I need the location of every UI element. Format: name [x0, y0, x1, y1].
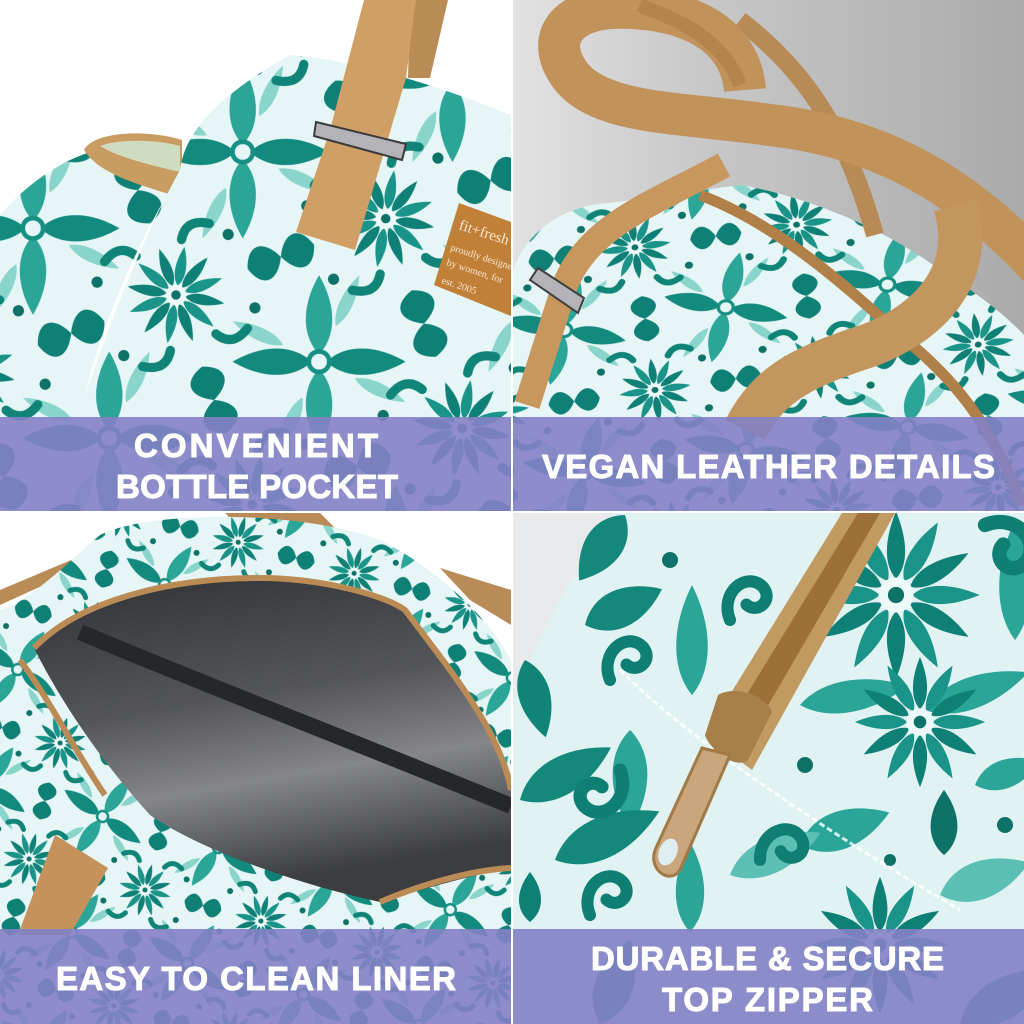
panel: vegan leather details — [513, 0, 1024, 511]
panel: durable and secure top zipper — [510, 504, 1024, 1024]
side puff of the bag — [0, 150, 180, 511]
caption text — [118, 433, 398, 499]
liner seam — [80, 632, 511, 806]
caption text: DURABLE & SECURE — [591, 940, 944, 977]
brand label: proudly designed — [449, 242, 518, 274]
looping leather strap — [559, 8, 1024, 268]
caption band — [0, 417, 511, 511]
panel: convenient bottle pocket — [0, 0, 518, 511]
caption band — [0, 929, 511, 1024]
caption text: TOP ZIPPER — [662, 981, 873, 1018]
zipper pull tab — [654, 748, 730, 876]
bag fabric — [513, 513, 1024, 929]
caption text: EASY TO CLEAN LINER — [56, 960, 456, 997]
brand label: by women, for — [445, 257, 505, 286]
caption band — [513, 417, 1024, 511]
caption text: VEGAN LEATHER DETAILS — [542, 448, 995, 485]
caption text — [592, 946, 944, 1012]
bag fabric — [0, 517, 511, 1024]
caption band — [513, 929, 1024, 1024]
printed floral motifs — [510, 504, 1024, 1024]
main bag front fabric — [50, 55, 511, 511]
zipper tape — [654, 513, 895, 876]
brand label: est. 2005 — [440, 275, 478, 297]
caption text: BOTTLE POCKET — [116, 468, 398, 505]
left strap with buckle — [527, 165, 724, 405]
lower leather strap — [745, 205, 960, 430]
bag top fabric — [513, 185, 1024, 511]
zipper track — [700, 195, 1022, 505]
back strap pieces — [0, 513, 511, 625]
panel: easy to clean liner — [0, 513, 511, 1024]
rear strap — [740, 20, 875, 235]
metal buckle — [530, 268, 584, 313]
bottle pocket rim — [84, 133, 182, 198]
brand label — [434, 203, 518, 316]
caption text: CONVENIENT — [134, 427, 378, 464]
metal buckle — [314, 122, 406, 160]
seam stitch — [620, 670, 960, 910]
zipper slider — [705, 691, 772, 763]
front strap — [18, 835, 108, 935]
brand label: fit+fresh — [457, 218, 511, 249]
zipper rim — [20, 578, 511, 902]
leather strap with buckle — [296, 0, 448, 250]
insulated liner interior — [34, 578, 511, 902]
